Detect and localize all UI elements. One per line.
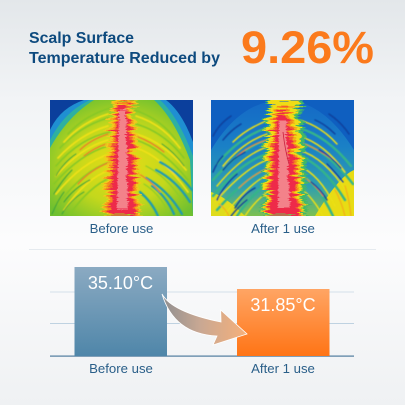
reduction percentage: 9.26%: [241, 22, 374, 73]
bar: after 1 use: [237, 289, 330, 356]
bar chart: [50, 267, 354, 376]
bar: before use: [74, 267, 167, 356]
heading: [29, 30, 220, 67]
image caption: before use: Before use: [90, 221, 153, 236]
bar: after 1 use: 31.85°C: [250, 295, 316, 315]
arrow: [162, 294, 247, 345]
heading: Scalp Surface: [29, 30, 134, 47]
thermal image: after 1 use: [211, 100, 354, 216]
heading: Temperature Reduced by: [29, 50, 220, 67]
bar: before use: 35.10°C: [88, 273, 153, 293]
bar label: after 1 use: After 1 use: [251, 361, 315, 376]
image caption: after 1 use: After 1 use: [251, 221, 315, 236]
bar label: before use: Before use: [89, 361, 153, 376]
thermal image: before use: [50, 100, 193, 216]
